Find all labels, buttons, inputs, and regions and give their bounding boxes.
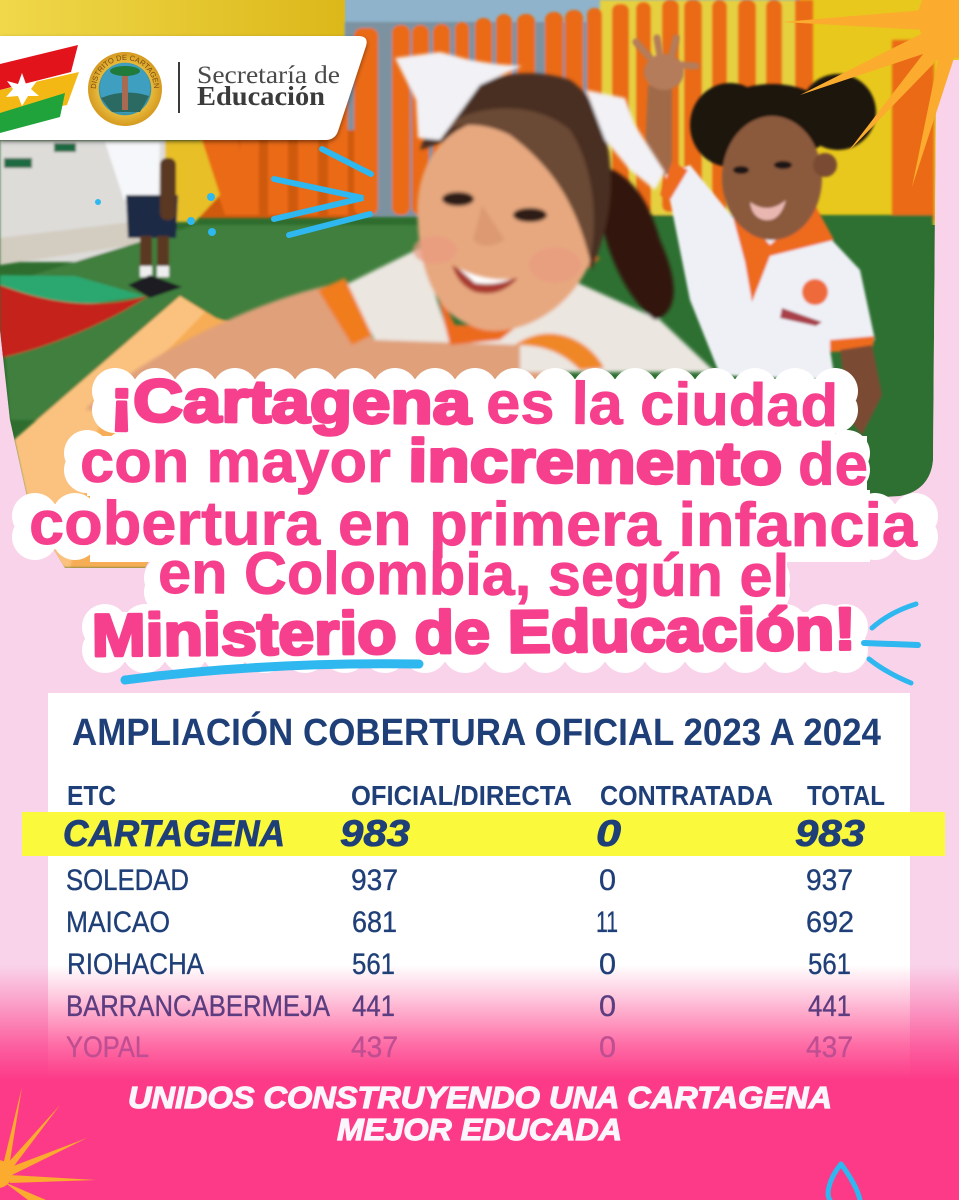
row: Soledad: 937: [351, 864, 398, 897]
footer slogan: UNIDOS CONSTRUYENDO UNA CARTAGENA: [128, 1080, 832, 1115]
headline: en Colombia, según el: [158, 539, 789, 609]
highlighted row: Cartagena: 983: [340, 813, 410, 854]
highlighted row: Cartagena: 0: [596, 813, 622, 854]
table header: CONTRATADA: [600, 780, 773, 811]
row: Yopal: [66, 1031, 853, 1064]
row: Barrancabermeja: [66, 990, 851, 1023]
row: Yopal: 437: [806, 1031, 853, 1064]
blue arrow doodle: [95, 149, 371, 236]
table rows: [66, 864, 854, 1064]
headline: ¡Cartagena: [110, 367, 472, 437]
row: Riohacha: 561: [352, 948, 395, 981]
headline: con mayor: [80, 428, 391, 495]
highlighted row: Cartagena: 983: [795, 813, 865, 854]
highlighted row: Cartagena: [22, 812, 945, 856]
row: Soledad: [66, 864, 853, 897]
sunburst: top right: [782, 0, 959, 187]
blue underline and ticks: [125, 604, 918, 683]
logo text: Secretaría de: [197, 62, 340, 89]
row: Riohacha: [67, 948, 851, 981]
pink footer band: [0, 1079, 959, 1200]
icon: Bolívar flag: [0, 45, 79, 133]
row: Barrancabermeja: BARRANCABERMEJA: [66, 990, 330, 1023]
row: Riohacha: RIOHACHA: [67, 948, 204, 981]
row: Maicao: MAICAO: [66, 906, 170, 939]
headline: cobertura en primera infancia: [29, 489, 918, 560]
footer slogan: [128, 1080, 832, 1147]
row: Riohacha: 0: [599, 948, 616, 981]
photo: children in the playground: [0, 0, 959, 570]
headline: [29, 367, 918, 669]
background child: [105, 142, 182, 298]
row: Yopal: YOPAL: [66, 1031, 149, 1064]
row: Maicao: [66, 906, 854, 939]
highlighted row: Cartagena: CARTAGENA: [63, 813, 285, 854]
sunburst: bottom left: [0, 1087, 96, 1200]
row: Yopal: 437: [351, 1031, 398, 1064]
logo panel: Educación: [197, 81, 325, 111]
headline: es la ciudad: [486, 369, 838, 439]
table header: TOTAL: [807, 780, 885, 811]
row: Soledad: SOLEDAD: [66, 864, 189, 897]
row: Soledad: 937: [806, 864, 853, 897]
row: Soledad: 0: [599, 864, 616, 897]
headline: Ministerio de Educación!: [92, 595, 856, 669]
row: Riohacha: 561: [808, 948, 851, 981]
pink footer gradient: [0, 965, 959, 1080]
row: Barrancabermeja: 441: [808, 990, 851, 1023]
girl in the back, waving: [636, 38, 882, 435]
girl in the front, smiling: [85, 52, 715, 410]
logo panel: [0, 35, 370, 145]
footer slogan: MEJOR EDUCADA: [337, 1112, 622, 1147]
table panel: [48, 693, 910, 1088]
row: Barrancabermeja: 441: [352, 990, 395, 1023]
table title: AMPLIACIÓN COBERTURA OFICIAL 2023 A 2024: [72, 710, 881, 754]
row: Yopal: 0: [599, 1031, 616, 1064]
row: Barrancabermeja: 0: [599, 990, 616, 1023]
row: Maicao: 11: [596, 906, 618, 939]
blue doodle: bottom right: [828, 1164, 860, 1200]
table header: [67, 780, 885, 811]
headline: incremento: [408, 427, 782, 497]
table header: OFICIAL/DIRECTA: [351, 780, 572, 811]
table header: ETC: [67, 780, 116, 811]
decorative right pink strip: [900, 60, 959, 500]
icon: city seal: [88, 52, 162, 126]
headline white bubble: [35, 379, 916, 662]
row: Maicao: 692: [806, 906, 854, 939]
headline: de: [798, 431, 868, 498]
row: Maicao: 681: [352, 906, 397, 939]
